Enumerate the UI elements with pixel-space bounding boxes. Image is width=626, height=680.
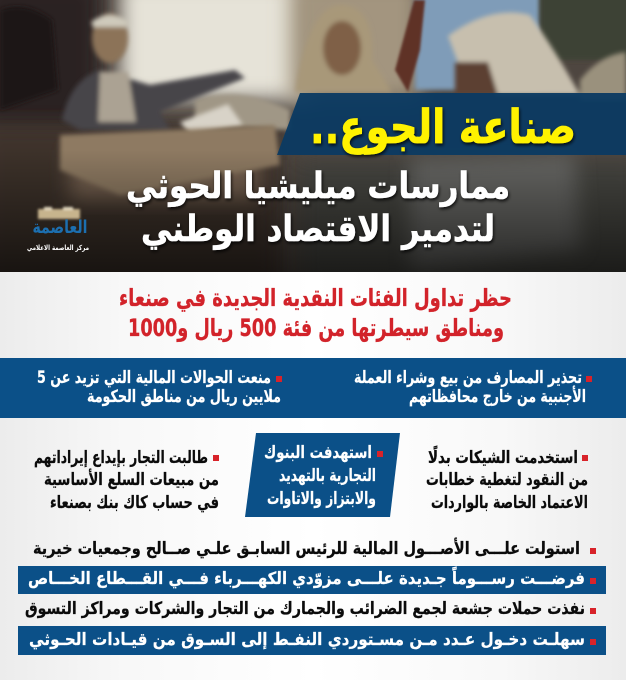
subtitle: لتدمير الاقتصاد الوطني <box>141 209 495 250</box>
title: yellow heading: صناعة الجوع.. <box>310 100 576 155</box>
header photo <box>0 0 626 295</box>
logo wordmark: العاصمة <box>32 217 88 238</box>
item: cheques <box>426 444 588 513</box>
man in headwrap <box>294 18 390 93</box>
panel: banks <box>245 433 400 517</box>
seated man <box>62 13 245 135</box>
person on far left <box>0 7 58 110</box>
panel: banks: استهدفت البنوك <box>264 443 372 463</box>
item: transfers ban: منعت الحوالات المالية التي تزيد عن 5 <box>37 368 271 388</box>
rifle <box>395 0 425 92</box>
item: cheques: استخدمت الشيكات بدلًا <box>428 444 578 468</box>
subtitle: ممارسات ميليشيا الحوثي <box>126 166 510 207</box>
list row 2 <box>18 565 606 594</box>
page background <box>0 272 626 680</box>
panel: blue band <box>0 358 626 418</box>
item: merchants: في حساب كاك بنك بصنعاء <box>50 493 219 513</box>
red heading: ومناطق سيطرتها من فئة 500 ريال و1000 <box>128 314 504 342</box>
title banner <box>277 93 626 155</box>
item: merchants: طالبت التجار بإيداع إيراداتهم <box>34 448 208 468</box>
panel: banks: التجارية بالتهديد <box>279 466 376 486</box>
item: transfers ban: ملايين ريال من مناطق الحكومة <box>87 387 281 407</box>
logo caption: مركز العاصمة الاعلامي <box>27 244 89 252</box>
stacks of money <box>60 125 280 195</box>
logo <box>27 207 89 252</box>
item: transfers ban <box>37 368 282 407</box>
fighter headscarf <box>448 13 626 100</box>
subtitle <box>126 166 510 250</box>
item: merchants <box>34 448 219 513</box>
item: currency warning <box>354 368 592 407</box>
item: merchants: من مبيعات السلع الأساسية <box>44 469 219 490</box>
red heading <box>119 284 512 342</box>
panel: banks: والابتزاز والاتاوات <box>267 489 376 509</box>
icon: building <box>38 207 80 219</box>
list row 4 <box>18 626 606 655</box>
